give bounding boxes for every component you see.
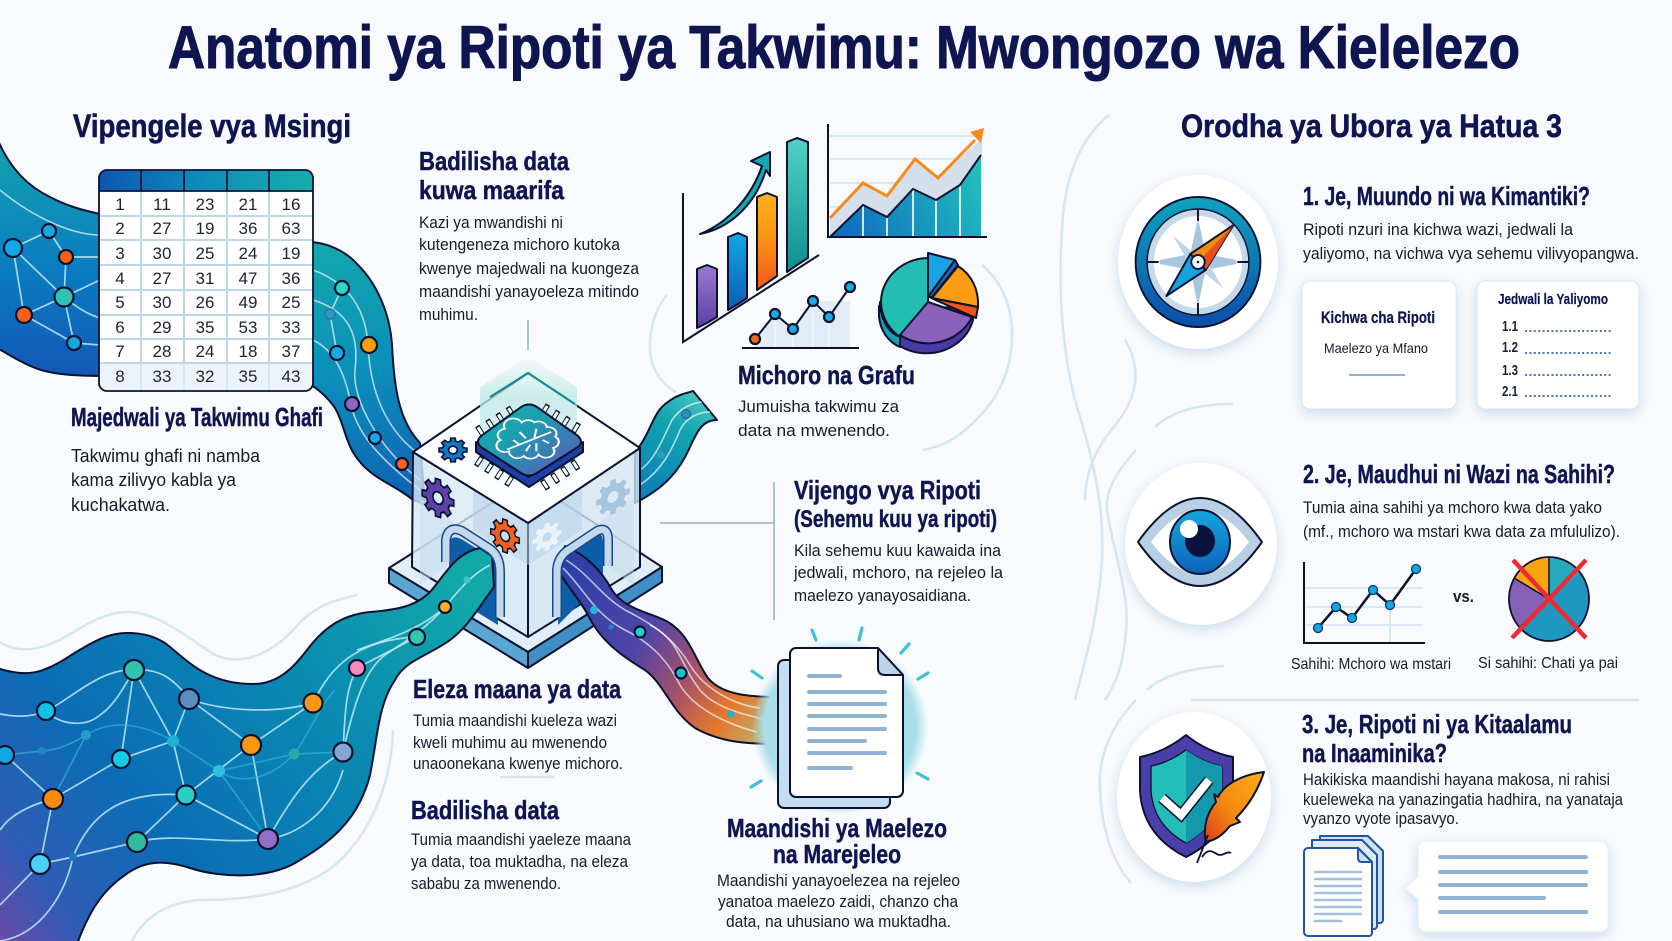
data table: 7 bbox=[115, 342, 125, 361]
data ribbon: lower network bbox=[0, 548, 494, 941]
text block: Badilisha data: Tumia maandishi yaeleze maana bbox=[411, 830, 631, 849]
cube base plate bbox=[389, 480, 662, 668]
panel: checklist item 3 bbox=[1117, 709, 1623, 936]
data table: 32 bbox=[196, 367, 214, 386]
pie chart: wrong example bbox=[1508, 556, 1590, 642]
data table bbox=[99, 170, 313, 391]
top face bbox=[413, 373, 640, 523]
data table: 36 bbox=[282, 269, 300, 288]
text block: Maandishi ya Maelezo na Marejeleo: Maandishi yanayoelezea na rejeleo bbox=[717, 871, 960, 890]
data table: 35 bbox=[196, 318, 214, 337]
text block: Badilisha data: Badilisha data bbox=[411, 795, 559, 825]
pie chart bbox=[879, 253, 978, 353]
data table: 49 bbox=[239, 293, 257, 312]
text block: Vijengo vya Ripoti: jedwali, mchoro, na rejeleo la bbox=[793, 563, 1004, 582]
card: table of contents: 1.3 bbox=[1502, 362, 1518, 379]
card: table of contents: 1.1 bbox=[1502, 318, 1518, 335]
data table: 6 bbox=[115, 318, 125, 337]
data table: 25 bbox=[196, 244, 214, 263]
data table: 30 bbox=[153, 244, 171, 263]
data table: 28 bbox=[153, 342, 171, 361]
data table: 11 bbox=[153, 195, 171, 214]
data table: 43 bbox=[282, 367, 300, 386]
card: table of contents: 1.2 bbox=[1502, 339, 1518, 356]
arch openings bbox=[449, 534, 603, 625]
table header bbox=[99, 170, 313, 191]
text block: Badilisha data kuwa maarifa: muhimu. bbox=[419, 305, 478, 324]
text block: Badilisha data kuwa maarifa: kutengeneza michoro kutoka bbox=[419, 235, 621, 254]
data table: 33 bbox=[153, 367, 171, 386]
data ribbon: purple to orange bbox=[559, 546, 778, 744]
data table: 18 bbox=[239, 342, 257, 361]
central processing cube bbox=[389, 357, 662, 668]
text block: Vijengo vya Ripoti bbox=[793, 475, 1004, 605]
text block: Badilisha data bbox=[411, 795, 631, 893]
data table: 30 bbox=[153, 293, 171, 312]
icon: ghost gear bbox=[533, 518, 561, 556]
panel: checklist item 3: Hakikiska maandishi hayana makosa, ni rahisi bbox=[1303, 770, 1610, 789]
data table: 37 bbox=[282, 342, 300, 361]
text block: Majedwali ya Takwimu Ghafi bbox=[71, 402, 323, 515]
icon: processor chip with brain bbox=[476, 404, 583, 487]
text block: Badilisha data kuwa maarifa: kuwa maarifa bbox=[419, 175, 564, 205]
data table: 21 bbox=[239, 195, 257, 214]
text block: Majedwali ya Takwimu Ghafi: Takwimu ghafi ni namba bbox=[71, 446, 261, 466]
text block: Majedwali ya Takwimu Ghafi: kuchakatwa. bbox=[71, 495, 170, 515]
panel: checklist item 3: na Inaaminika? bbox=[1302, 738, 1447, 768]
heading: Orodha ya Ubora ya Hatua 3: Orodha ya Ubora ya Hatua 3 bbox=[1181, 108, 1562, 144]
area chart bbox=[828, 124, 987, 237]
text block: Badilisha data kuwa maarifa: Badilisha data bbox=[419, 146, 569, 176]
text block: Badilisha data kuwa maarifa: Kazi ya mwandishi ni bbox=[419, 213, 563, 232]
data table: 19 bbox=[196, 219, 214, 238]
icon: orange gear bbox=[491, 515, 519, 557]
data table: 27 bbox=[153, 269, 171, 288]
data table: 24 bbox=[196, 342, 214, 361]
panel: checklist item 2: Tumia aina sahihi ya mchoro kwa data yako bbox=[1303, 498, 1602, 517]
panel: checklist item 3: vyanzo vyote ipasavyo. bbox=[1303, 809, 1459, 828]
text block: Michoro na Grafu: data na mwenendo. bbox=[738, 421, 890, 440]
text block: Badilisha data: sababu za mwenendo. bbox=[411, 874, 561, 893]
text block: Badilisha data kuwa maarifa bbox=[419, 146, 639, 324]
text block: Michoro na Grafu: Jumuisha takwimu za bbox=[738, 397, 900, 416]
data table: 1 bbox=[115, 195, 125, 214]
data table: 63 bbox=[282, 219, 300, 238]
label: vs.: vs. bbox=[1453, 587, 1474, 606]
text block: Vijengo vya Ripoti: (Sehemu kuu ya ripoti) bbox=[794, 506, 997, 533]
text block: Maandishi ya Maelezo na Marejeleo: yanatoa maelezo zaidi, chanzo cha bbox=[718, 892, 958, 911]
text block: Majedwali ya Takwimu Ghafi: kama zilivyo kabla ya bbox=[71, 470, 237, 490]
arch frames bbox=[446, 529, 608, 617]
callout: speech bubble bbox=[1405, 841, 1608, 932]
caption: wrong: Si sahihi: Chati ya pai bbox=[1478, 655, 1618, 672]
card: report title: Kichwa cha Ripoti bbox=[1321, 308, 1435, 327]
heading: Vipengele vya Msingi: Vipengele vya Msingi bbox=[73, 108, 351, 144]
data table: 31 bbox=[196, 269, 214, 288]
text block: Badilisha data kuwa maarifa: kwenye majedwali na kuongeza bbox=[419, 259, 639, 278]
card: table of contents bbox=[1477, 281, 1639, 409]
text block: Majedwali ya Takwimu Ghafi: Majedwali ya Takwimu Ghafi bbox=[71, 402, 323, 432]
caption: correct: Sahihi: Mchoro wa mstari bbox=[1291, 656, 1451, 673]
text block: Maandishi ya Maelezo na Marejeleo bbox=[717, 813, 960, 931]
data table: 33 bbox=[282, 318, 300, 337]
data ribbon: upper right exit bbox=[635, 391, 717, 503]
data table: 8 bbox=[115, 367, 125, 386]
data table: 2 bbox=[115, 219, 125, 238]
data table: 47 bbox=[239, 269, 257, 288]
text block: Vijengo vya Ripoti: Kila sehemu kuu kawaida ina bbox=[794, 541, 1002, 560]
icon: stacked documents bbox=[1304, 836, 1383, 936]
data table: 29 bbox=[153, 318, 171, 337]
card: table of contents: 2.1 bbox=[1502, 383, 1518, 400]
card: table of contents: Jedwali la Yaliyomo bbox=[1498, 291, 1608, 308]
data table: 23 bbox=[196, 195, 214, 214]
data table: 5 bbox=[115, 293, 125, 312]
text block: Vijengo vya Ripoti: maelezo yanayosaidiana. bbox=[794, 586, 971, 605]
panel: checklist item 3: kueleweka na yanazingatia hadhira, na yanataja bbox=[1303, 790, 1623, 809]
data ribbon: upper left bbox=[0, 138, 105, 376]
data table: 19 bbox=[282, 244, 300, 263]
card: report title bbox=[1302, 281, 1456, 409]
data table: 3 bbox=[115, 244, 125, 263]
text block: Michoro na Grafu bbox=[738, 360, 915, 440]
data table: 25 bbox=[282, 293, 300, 312]
icon: blue gear bbox=[439, 438, 467, 462]
data ribbon: table to core bbox=[308, 242, 425, 505]
icon: purple gear bbox=[422, 474, 454, 522]
data table: 16 bbox=[282, 195, 300, 214]
text block: Badilisha data kuwa maarifa: maandishi yanayoeleza mitindo bbox=[419, 282, 639, 301]
small line chart bbox=[742, 282, 859, 348]
bar chart bbox=[683, 138, 819, 342]
data table: 4 bbox=[115, 269, 125, 288]
text block: Maandishi ya Maelezo na Marejeleo: data, na uhusiano wa muktadha. bbox=[726, 912, 951, 931]
data table: 35 bbox=[239, 367, 257, 386]
line chart: correct example bbox=[1304, 562, 1425, 643]
text block: Maandishi ya Maelezo na Marejeleo: na Marejeleo bbox=[773, 839, 901, 869]
text block: Eleza maana ya data: Eleza maana ya data bbox=[413, 674, 621, 704]
icon: shield with feather bbox=[1117, 712, 1271, 882]
data table: 27 bbox=[153, 219, 171, 238]
text block: Maandishi ya Maelezo na Marejeleo: Maandishi ya Maelezo bbox=[727, 813, 947, 843]
text block: Michoro na Grafu: Michoro na Grafu bbox=[738, 360, 915, 390]
panel: checklist item 1 bbox=[1118, 175, 1639, 409]
text block: Vijengo vya Ripoti: Vijengo vya Ripoti bbox=[794, 475, 981, 505]
panel: checklist item 3: 3. Je, Ripoti ni ya Kitaalamu bbox=[1302, 709, 1572, 739]
panel: checklist item 2 bbox=[1125, 459, 1620, 673]
data table: 24 bbox=[239, 244, 257, 263]
panel: checklist item 1: yaliyomo, na vichwa vya sehemu vilivyopangwa. bbox=[1303, 244, 1639, 263]
text block: Eleza maana ya data bbox=[413, 674, 623, 773]
text block: Eleza maana ya data: Tumia maandishi kueleza wazi bbox=[413, 711, 617, 730]
icon: growth arrow bbox=[700, 152, 770, 234]
data table: 26 bbox=[196, 293, 214, 312]
icon: eye bbox=[1125, 463, 1277, 625]
text block: Eleza maana ya data: unaoonekana kwenye michoro. bbox=[413, 754, 623, 773]
icon: faded gear bbox=[596, 474, 630, 520]
panel: checklist item 2: (mf., mchoro wa mstari kwa data za mfululizo). bbox=[1303, 522, 1620, 541]
data table: 53 bbox=[239, 318, 257, 337]
text block: Badilisha data: ya data, toa muktadha, na eleza bbox=[411, 852, 628, 871]
glass faces bbox=[412, 452, 528, 637]
icon: compass bbox=[1118, 175, 1278, 349]
card: report title: Maelezo ya Mfano bbox=[1324, 340, 1428, 356]
panel: checklist item 1: Ripoti nzuri ina kichwa wazi, jedwali la bbox=[1303, 220, 1574, 239]
icon: glowing document bbox=[751, 628, 928, 815]
data table: 36 bbox=[239, 219, 257, 238]
text block: Eleza maana ya data: kweli muhimu au mwenendo bbox=[413, 733, 607, 752]
